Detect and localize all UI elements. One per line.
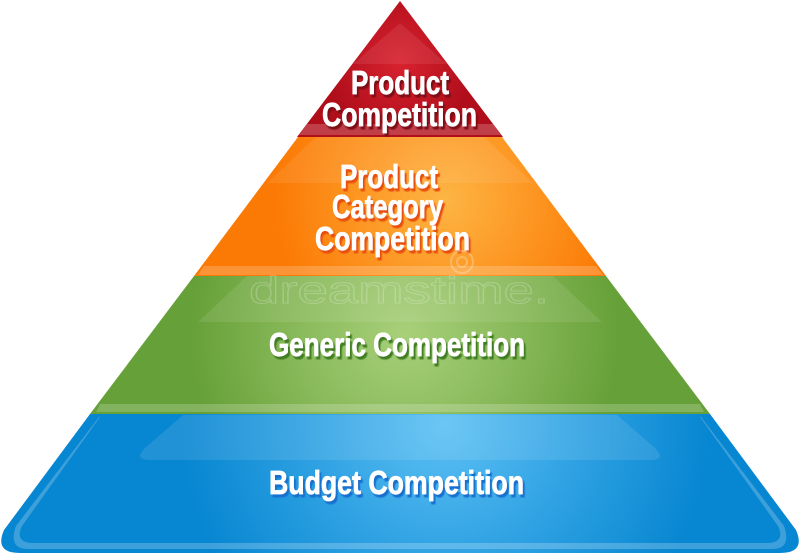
watermark: dreamstime. (249, 270, 549, 312)
bottom band (96, 404, 704, 412)
label: product category competition: Competition (315, 220, 470, 257)
panel: product category competition tier (194, 137, 606, 276)
panel: product competition tier (297, 1, 503, 137)
inner highlight trapezoid (140, 415, 660, 460)
label: product competition (322, 64, 477, 133)
inner highlight triangle (353, 23, 447, 64)
label: product category competition: Product (340, 158, 438, 195)
bottom band (198, 266, 603, 275)
label: generic competition: Generic Competition (269, 326, 525, 363)
inner highlight trapezoid (267, 137, 533, 183)
inner highlight trapezoid (198, 276, 602, 322)
panel: generic competition tier (90, 276, 710, 414)
bottom band (299, 124, 501, 135)
label: budget competition: Budget Competition (269, 464, 524, 501)
label: product competition: Competition (322, 96, 477, 133)
label: product category competition: Category (332, 188, 443, 225)
label: product competition: Product (351, 64, 449, 101)
label: product category competition (315, 158, 470, 257)
bottom rim highlight (14, 417, 786, 549)
watermark (249, 251, 549, 312)
panel: budget competition tier (1, 414, 799, 553)
